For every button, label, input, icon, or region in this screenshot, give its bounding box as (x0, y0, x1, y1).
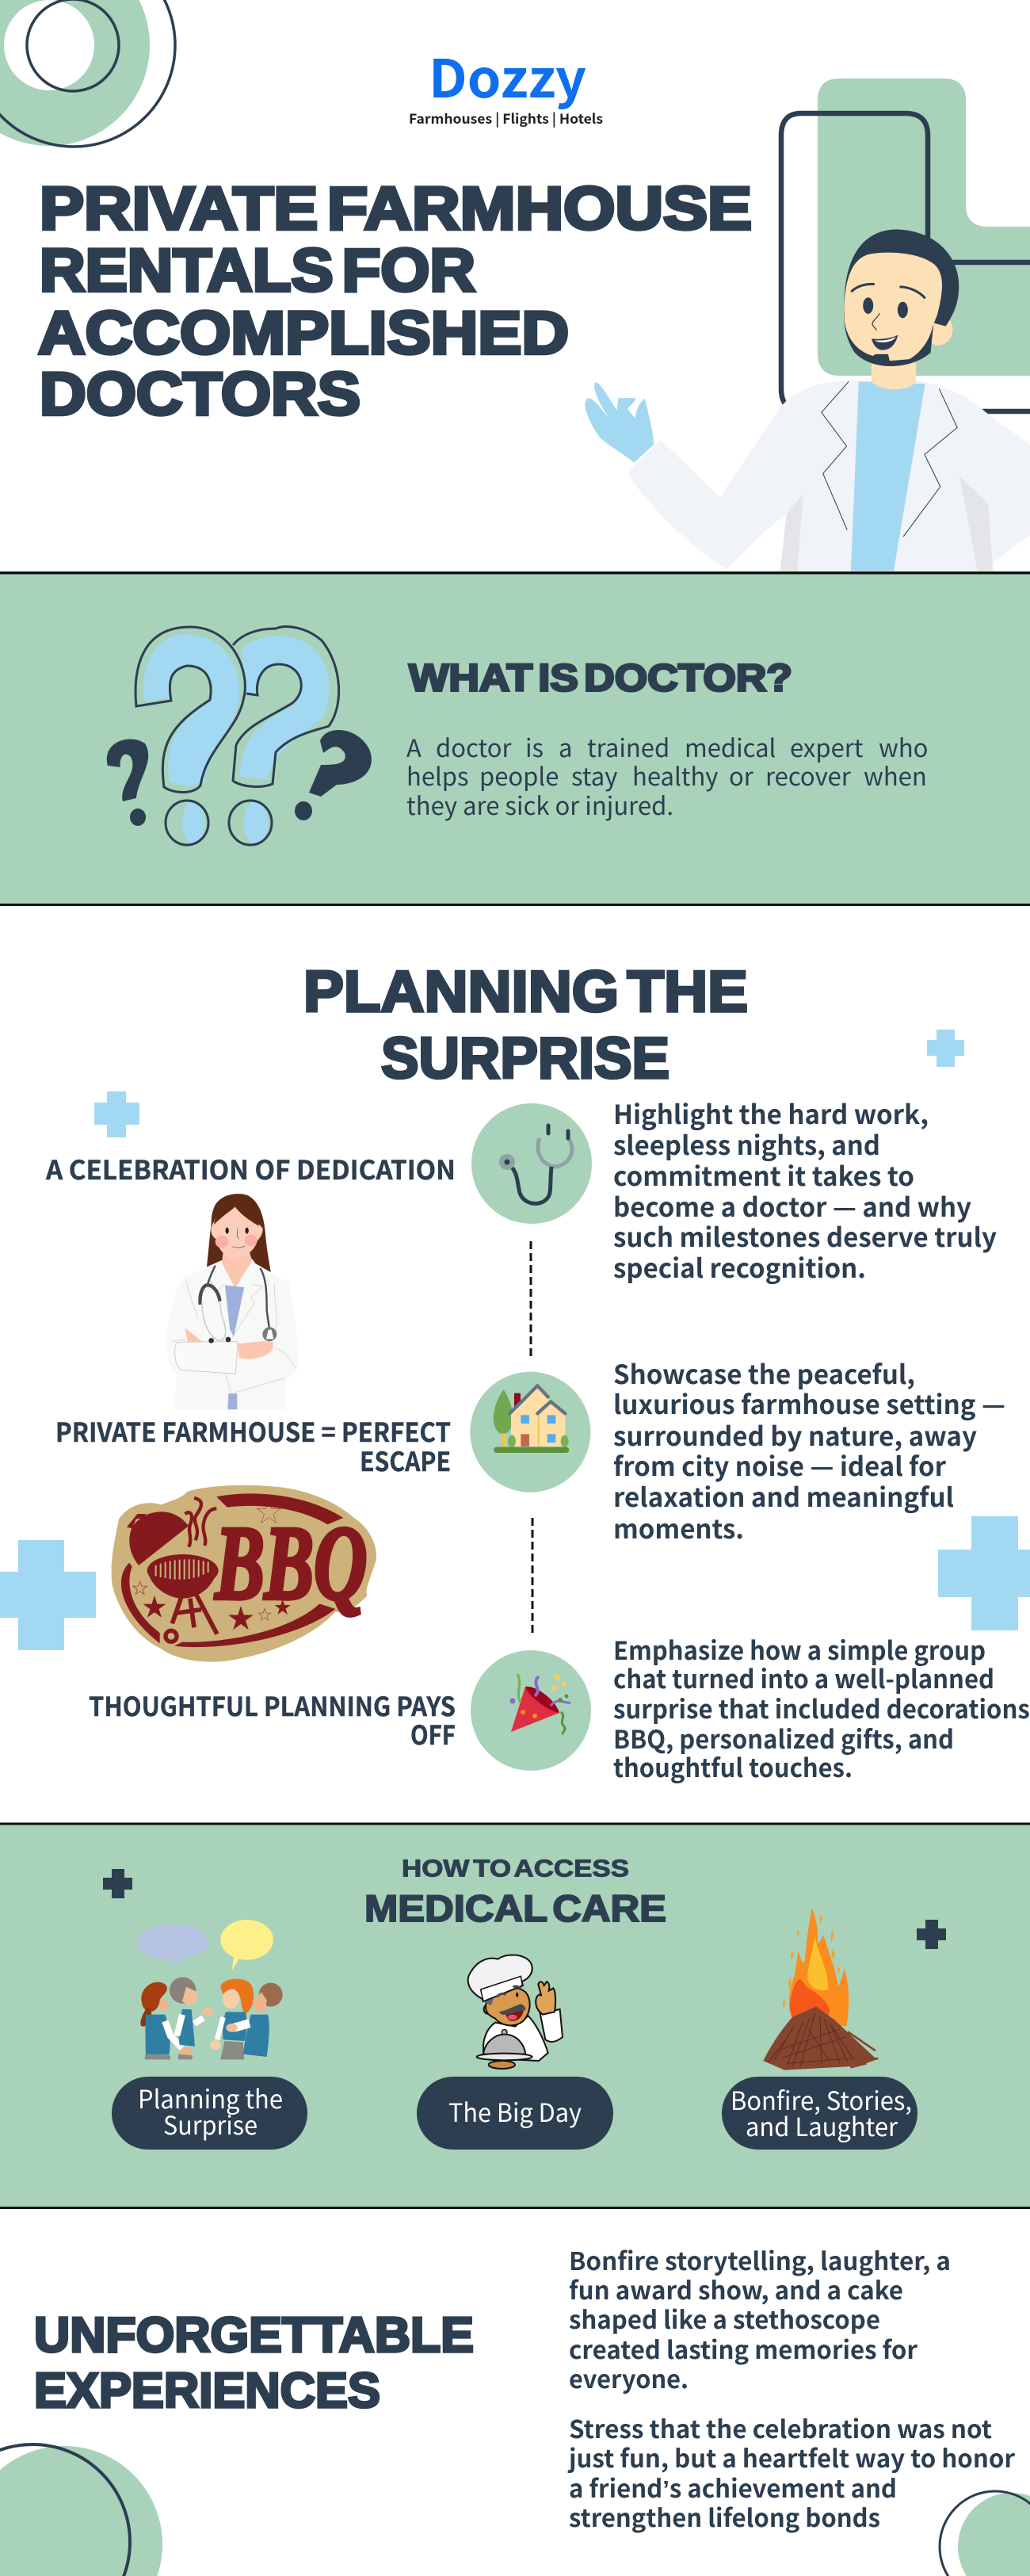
friend two (170, 1977, 196, 2004)
pill: the big day (417, 2077, 613, 2150)
chef body (483, 2016, 548, 2061)
heading: unforgettable experiences (34, 2308, 474, 2418)
cloche (502, 2030, 507, 2035)
label: thoughtful planning (89, 1686, 456, 1752)
logs (763, 2007, 877, 2070)
text: showcase the peaceful: luxurious farmhouse setting — (613, 1384, 1005, 1422)
text: doctor definition: is (525, 728, 544, 764)
pill: planning the surprise: Surprise (163, 2106, 258, 2142)
heading: planning the surprise: SURPRISE (381, 1026, 670, 1091)
hair (207, 1194, 271, 1272)
label: private farmhouse: PRIVATE FARMHOUSE = PERFECT (55, 1412, 451, 1450)
heading: how to access medical care: HOW TO ACCESS (402, 1855, 629, 1882)
pill: the big day: The Big Day (448, 2093, 582, 2130)
text: doctor definition: people (479, 757, 559, 793)
text: emphasize group chat: thoughtful touches. (613, 1749, 853, 1785)
badge: BBQ (112, 1485, 376, 1662)
text: doctor definition: stay (571, 757, 617, 793)
text: stress the celebration: strengthen lifelong bonds (569, 2498, 880, 2534)
heading: what is doctor: WHAT IS DOCTOR? (409, 658, 792, 699)
text: stress the celebration: a friend’s achievement and (569, 2469, 897, 2505)
heading: unforgettable experiences: UNFORGETTABLE (34, 2308, 474, 2363)
decorative circles: bottom right (940, 2491, 1030, 2576)
chef hat (468, 1955, 532, 2001)
heading: how to access medical care (364, 1855, 666, 1929)
text: bonfire storytelling: Bonfire storytelling, laughter, a (569, 2242, 951, 2277)
logo: Dozzy: Farmhouses | Flights | Hotels (409, 108, 603, 128)
title (38, 175, 752, 428)
lab coat (166, 1259, 299, 1409)
text: highlight the hard work: commitment it takes to (613, 1156, 914, 1194)
friend four (259, 1983, 283, 2007)
text: doctor definition: medical (685, 728, 776, 764)
text: stress the celebration: Stress that the celebration was not (569, 2410, 992, 2445)
connector: dashed line 2 (531, 1518, 534, 1633)
speech bubbles (136, 1924, 208, 1959)
label: a celebration of dedication: A CELEBRATION OF DEDICATION (45, 1149, 456, 1187)
text: bonfire storytelling: fun award show, and a cake (569, 2271, 903, 2307)
text: bonfire storytelling: created lasting memories for (569, 2330, 917, 2366)
label: thoughtful planning: OFF (410, 1714, 456, 1752)
text: emphasize group chat: BBQ, personalized gifts, and (613, 1720, 954, 1756)
text: bonfire storytelling (569, 2242, 951, 2395)
text: emphasize group chat: chat turned into a well-planned (613, 1660, 994, 1696)
pill: planning the surprise (112, 2077, 307, 2150)
text: showcase the peaceful: from city noise — ideal for (613, 1446, 947, 1484)
title: RENTALS FOR (40, 237, 475, 304)
grill (127, 1514, 147, 1528)
plus icons: navy (103, 1869, 946, 1949)
title: ACCOMPLISHED (38, 300, 569, 367)
icon: house circle (470, 1372, 590, 1492)
decorative circles: bottom left (0, 2444, 162, 2576)
stethoscope (208, 1266, 216, 1286)
text: doctor definition: A (406, 728, 422, 764)
background shape: green panel and navy outline (781, 78, 1030, 411)
doctor coat (628, 380, 1030, 571)
text: highlight the hard work: such milestones deserve truly (613, 1217, 997, 1255)
folded arms (185, 1328, 202, 1342)
text: emphasize group chat: Emphasize how a simple group (613, 1631, 986, 1668)
heading: planning the surprise: PLANNING THE (303, 960, 748, 1024)
glove (585, 382, 654, 463)
pill: planning the surprise: Planning the (138, 2080, 283, 2116)
text: doctor definition: helps (406, 757, 469, 793)
text: doctor definition: a (559, 728, 572, 764)
illustration: male doctor (585, 229, 1030, 571)
text: doctor definition: trained (587, 728, 670, 764)
text: doctor definition: or (729, 757, 754, 793)
stars (143, 1596, 166, 1618)
heading: unforgettable experiences: EXPERIENCES (34, 2364, 380, 2418)
heading: planning the surprise (303, 960, 748, 1091)
chef face (484, 2005, 494, 2014)
pill: bonfire, stories, and laughter: Bonfire, Stories, (731, 2081, 912, 2118)
title: DOCTORS (40, 361, 360, 428)
text: doctor definition: recover (765, 757, 852, 793)
text: bonfire storytelling: everyone. (569, 2360, 689, 2395)
logo: Dozzy (409, 37, 603, 128)
text: stress the celebration (567, 2410, 1015, 2534)
title: PRIVATE FARMHOUSE (40, 175, 752, 243)
logo: Dozzy: Dozzy (429, 37, 586, 113)
text: doctor definition: when (864, 757, 927, 793)
icon: party popper circle (471, 1650, 591, 1771)
label: thoughtful planning: THOUGHTFUL PLANNING PAYS (89, 1686, 456, 1724)
text: doctor definition: who (879, 728, 928, 764)
text: doctor definition: healthy (632, 757, 718, 793)
label: private farmhouse (55, 1412, 451, 1479)
text: doctor definition: expert (790, 728, 864, 764)
illustration: bonfire (763, 1908, 878, 2070)
face and hair (924, 314, 952, 346)
friend one (158, 1997, 169, 2009)
connector: dashed line 1 (529, 1241, 532, 1356)
illustration: group of friends (136, 1920, 283, 2059)
text: highlight the hard work: special recognition. (613, 1248, 866, 1286)
text: highlight the hard work: become a doctor — and why (613, 1187, 971, 1225)
text: showcase the peaceful: relaxation and meaningful (613, 1477, 954, 1515)
decorative circles: top left (0, 0, 175, 147)
pill: bonfire, stories, and laughter: and Laughter (746, 2108, 898, 2144)
text: bonfire storytelling: shaped like a stethoscope (569, 2300, 880, 2336)
text: doctor definition (406, 728, 928, 822)
icon: question marks (107, 627, 372, 845)
pill: bonfire, stories, and laughter (722, 2077, 917, 2150)
text: showcase the peaceful: surrounded by nature, away (613, 1416, 977, 1454)
plus icons: light blue (0, 1030, 1030, 1650)
text: doctor definition: doctor (436, 728, 512, 764)
icon: stethoscope circle (471, 1103, 592, 1224)
text: highlight the hard work (613, 1094, 997, 1286)
label: private farmhouse: ESCAPE (360, 1441, 451, 1479)
text: stress the celebration: just fun, but a heartfelt way to honor (567, 2439, 1015, 2475)
text: showcase the peaceful: moments. (613, 1508, 744, 1546)
BBQ lettering: BBQ (214, 1504, 367, 1622)
text: highlight the hard work: Highlight the hard work, (613, 1094, 929, 1132)
text: emphasize group chat (613, 1631, 1030, 1785)
illustration: female doctor (166, 1194, 299, 1409)
text: showcase the peaceful: Showcase the peaceful, (613, 1354, 915, 1392)
flames (789, 1908, 849, 2027)
divider lines and panel: what is doctor (0, 571, 1030, 906)
illustration: chef (468, 1955, 563, 2069)
face (211, 1206, 263, 1259)
panel: how to access medical care (0, 1823, 1030, 2209)
text: doctor definition: they are sick or injured. (406, 786, 673, 822)
text: highlight the hard work: sleepless nights, and (613, 1125, 880, 1163)
heading: how to access medical care: MEDICAL CARE (364, 1887, 666, 1929)
friend three (220, 1979, 254, 2013)
text: showcase the peaceful (613, 1354, 1005, 1546)
